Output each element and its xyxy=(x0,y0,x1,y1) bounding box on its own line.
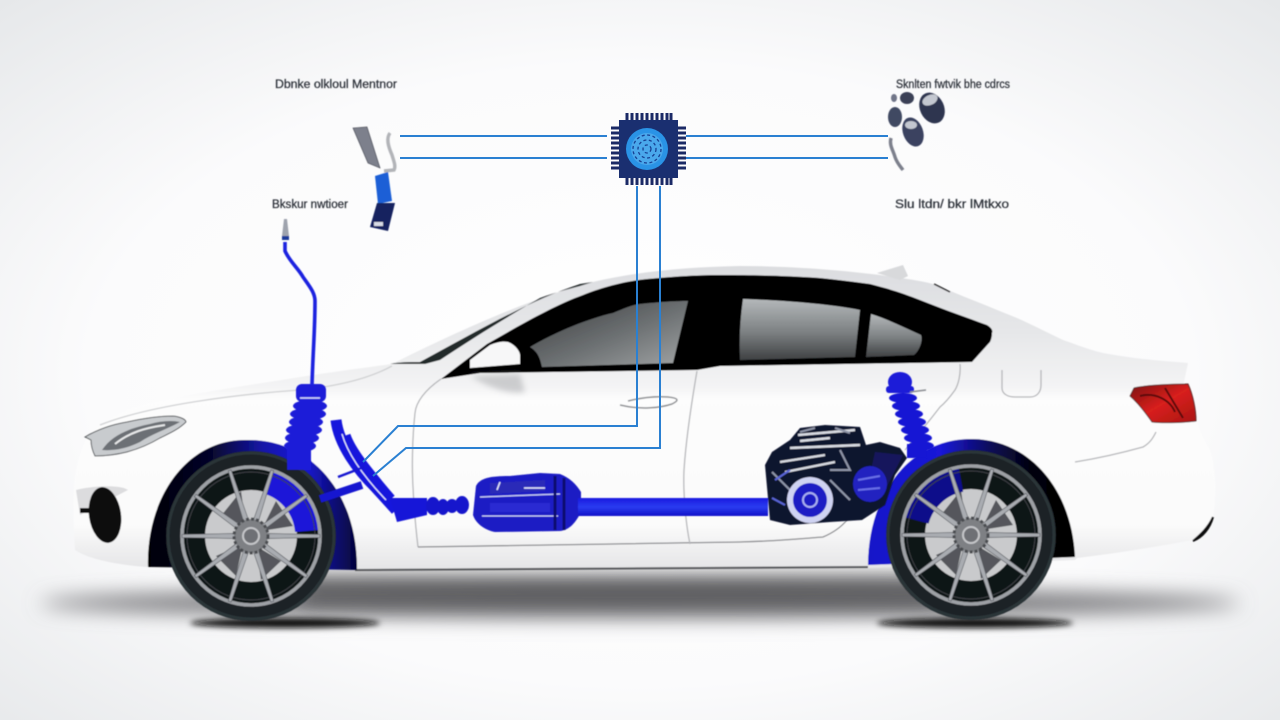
mirror shadow xyxy=(470,374,525,393)
rear wheel arch xyxy=(868,439,1075,565)
windshield xyxy=(390,282,593,364)
front wheel arch xyxy=(148,440,357,570)
spoiler fin xyxy=(877,265,908,280)
icon: control chip xyxy=(611,113,686,185)
blue connector xyxy=(375,172,392,204)
lower sill line xyxy=(355,567,868,570)
side window frame xyxy=(441,275,992,379)
icon: wheel sensor cluster xyxy=(888,88,950,170)
connector housing xyxy=(370,203,395,231)
front fog lamp xyxy=(76,485,128,545)
icon: pedal sensor xyxy=(353,127,395,231)
rear bumper trim xyxy=(1193,517,1213,541)
rear wheel xyxy=(886,450,1056,620)
front window glass xyxy=(530,301,688,367)
door and panel lines xyxy=(100,364,1156,547)
tail light xyxy=(1130,384,1196,423)
engine xyxy=(765,425,907,525)
joint xyxy=(426,496,469,515)
label: middle right: Slu ltdn/ bkr lMtkxo xyxy=(895,199,1009,211)
quarter window glass xyxy=(866,314,922,357)
front strut xyxy=(284,384,327,470)
drivetrain xyxy=(282,219,934,532)
label: middle left: Bkskur nwtioer xyxy=(272,199,348,211)
pedal plate xyxy=(353,127,380,168)
label: top left: Dbnke olkloul Mentnor xyxy=(275,79,397,91)
front wheel xyxy=(166,451,336,621)
rear window glass xyxy=(740,299,860,360)
front suspension arm xyxy=(320,420,427,522)
label: top right: Sknlten fwtvik bhe cdrcs xyxy=(896,79,1010,91)
mirror xyxy=(470,342,520,368)
electric motor xyxy=(473,473,581,532)
headlight xyxy=(85,416,186,456)
wiring harness xyxy=(363,136,888,476)
rear strut xyxy=(886,372,934,458)
drive shaft xyxy=(578,498,768,516)
ground shadow xyxy=(40,575,1240,628)
car body xyxy=(74,266,1215,570)
door handle xyxy=(620,397,677,408)
silver bracket xyxy=(384,133,395,171)
blue sensor cable xyxy=(282,219,315,385)
car xyxy=(74,265,1215,621)
